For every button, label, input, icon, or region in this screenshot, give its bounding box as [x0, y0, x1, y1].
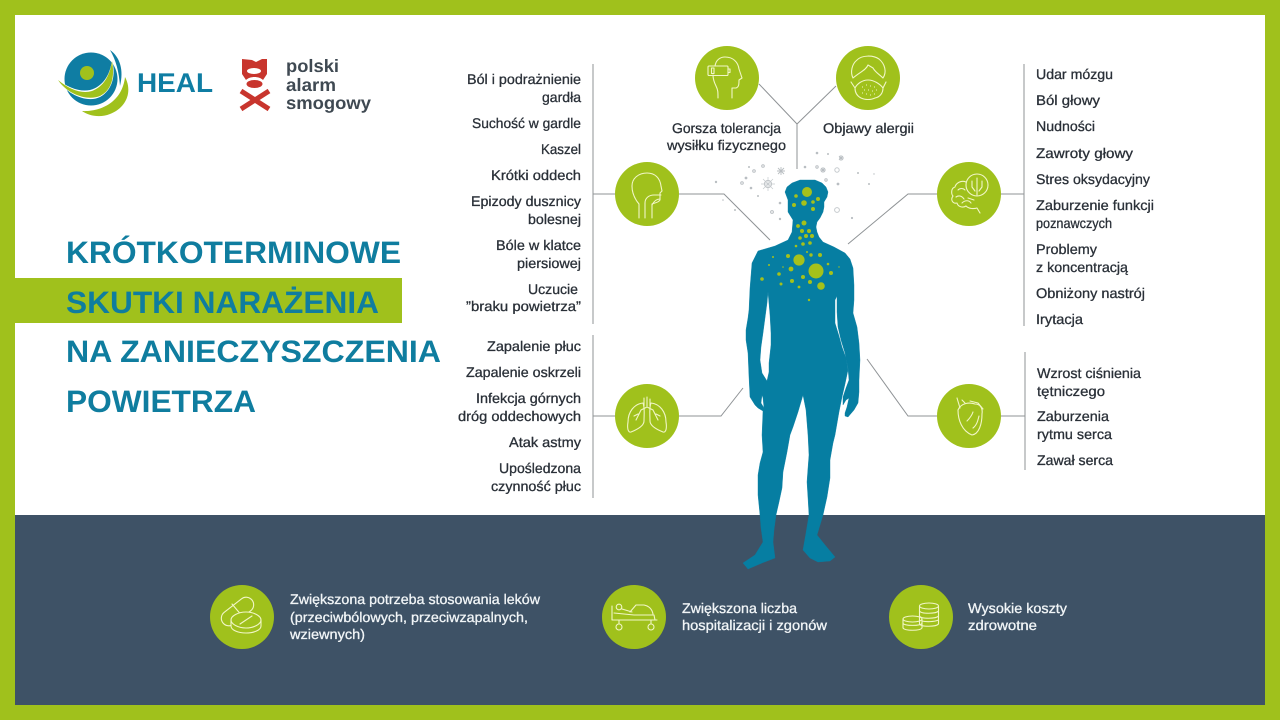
footer item: hospitalisation: [602, 585, 828, 649]
footer item: medication: wziewnych): [289, 626, 365, 642]
text block: allergy: Objawy alergii: [823, 120, 914, 136]
text block: lung symptoms: [458, 338, 581, 494]
title: NA ZANIECZYSZCZENIA: [66, 334, 441, 369]
icon: coin stacks: [889, 585, 953, 649]
text block: lung symptoms: czynność płuc: [491, 478, 581, 494]
particles around the head: [715, 152, 875, 220]
text block: lung symptoms: Infekcja górnych: [476, 390, 581, 406]
logo: polski alarm smogowy: alarm: [286, 75, 336, 95]
text block: throat symptoms: Uczucie: [528, 281, 578, 297]
footer item: medication: [210, 585, 541, 649]
text block: exercise tolerance: wysiłku fizycznego: [666, 137, 786, 153]
text block: heart symptoms: tętniczego: [1037, 383, 1105, 399]
text block: heart symptoms: Zawał serca: [1037, 452, 1113, 468]
icon: face with allergy rash: [836, 46, 900, 110]
logo: polski alarm smogowy: polski: [286, 56, 339, 76]
text block: throat symptoms: piersiowej: [517, 255, 581, 271]
text block: lung symptoms: dróg oddechowych: [458, 408, 581, 424]
text block: throat symptoms: gardła: [542, 89, 581, 105]
text block: throat symptoms: Bóle w klatce: [496, 237, 581, 253]
text block: heart symptoms: Zaburzenia: [1037, 408, 1109, 424]
icon: brain with circuit: [937, 162, 1001, 226]
footer item: hospitalisation: hospitalizacji i zgonów: [682, 617, 828, 633]
logo: polski alarm smogowy: smogowy: [286, 93, 371, 113]
text block: brain symptoms: Stres oksydacyjny: [1036, 171, 1150, 187]
text block: brain symptoms: Zaburzenie funkcji: [1036, 197, 1154, 213]
title: SKUTKI NARAŻENIA: [66, 285, 379, 320]
footer item: costs: zdrowotne: [968, 617, 1037, 633]
text block: lung symptoms: Atak astmy: [509, 434, 581, 450]
pollution dots in the body: [760, 187, 840, 301]
logo: polski alarm smogowy: [241, 56, 371, 113]
icon: head with low battery: [695, 46, 759, 110]
text block: throat symptoms: ”braku powietrza”: [466, 298, 581, 314]
footer item: hospitalisation: Zwiększona liczba: [682, 600, 797, 616]
text block: brain symptoms: poznawczych: [1036, 215, 1112, 231]
text block: exercise tolerance: Gorsza tolerancja: [672, 120, 781, 136]
text block: throat symptoms: Krótki oddech: [491, 167, 581, 183]
footer item: medication: (przeciwbólowych, przeciwzapalnych,: [290, 609, 528, 625]
text block: brain symptoms: z koncentracją: [1036, 259, 1128, 275]
footer item: costs: Wysokie koszty: [968, 600, 1067, 616]
footer item: medication: Zwiększona potrzeba stosowania leków: [290, 591, 541, 607]
panel: white main area: [15, 15, 1265, 515]
footer item: costs: [889, 585, 1067, 649]
text block: lung symptoms: Zapalenie płuc: [487, 338, 581, 354]
text block: throat symptoms: bolesnej: [528, 211, 581, 227]
text block: brain symptoms: Irytacja: [1036, 311, 1083, 327]
text block: throat symptoms: [466, 71, 581, 314]
logo: HEAL: HEAL: [137, 68, 213, 98]
text block: exercise tolerance: [666, 120, 786, 153]
text block: brain symptoms: Zawroty głowy: [1036, 145, 1133, 161]
text block: brain symptoms: Udar mózgu: [1036, 66, 1113, 82]
text block: throat symptoms: Ból i podrażnienie: [467, 71, 581, 87]
human body silhouette: [743, 180, 860, 569]
title: POWIETRZA: [66, 384, 256, 419]
text block: heart symptoms: [1037, 365, 1141, 468]
text block: brain symptoms: Problemy: [1036, 241, 1097, 257]
icon: hospital bed: [602, 585, 666, 649]
text block: heart symptoms: Wzrost ciśnienia: [1037, 365, 1141, 381]
title: KRÓTKOTERMINOWE: [66, 235, 401, 270]
icon: throat and airway: [615, 162, 679, 226]
text block: throat symptoms: Epizody dusznicy: [471, 193, 581, 209]
text block: brain symptoms: Nudności: [1036, 118, 1095, 134]
text block: brain symptoms: Obniżony nastrój: [1036, 285, 1145, 301]
panel: dark footer: [15, 515, 1265, 705]
logo: HEAL: [57, 50, 213, 116]
text block: brain symptoms: Ból głowy: [1036, 92, 1100, 108]
text block: throat symptoms: Suchość w gardle: [472, 115, 581, 131]
text block: lung symptoms: Zapalenie oskrzeli: [466, 364, 581, 380]
text block: heart symptoms: rytmu serca: [1037, 426, 1112, 442]
text block: throat symptoms: Kaszel: [541, 141, 581, 157]
icon: pills: [210, 585, 274, 649]
title: [15, 235, 441, 419]
icon: lungs: [615, 384, 679, 448]
text block: lung symptoms: Upośledzona: [499, 460, 581, 476]
connector lines: [593, 64, 1025, 498]
text block: brain symptoms: [1036, 66, 1154, 327]
icon: anatomical heart: [937, 384, 1001, 448]
